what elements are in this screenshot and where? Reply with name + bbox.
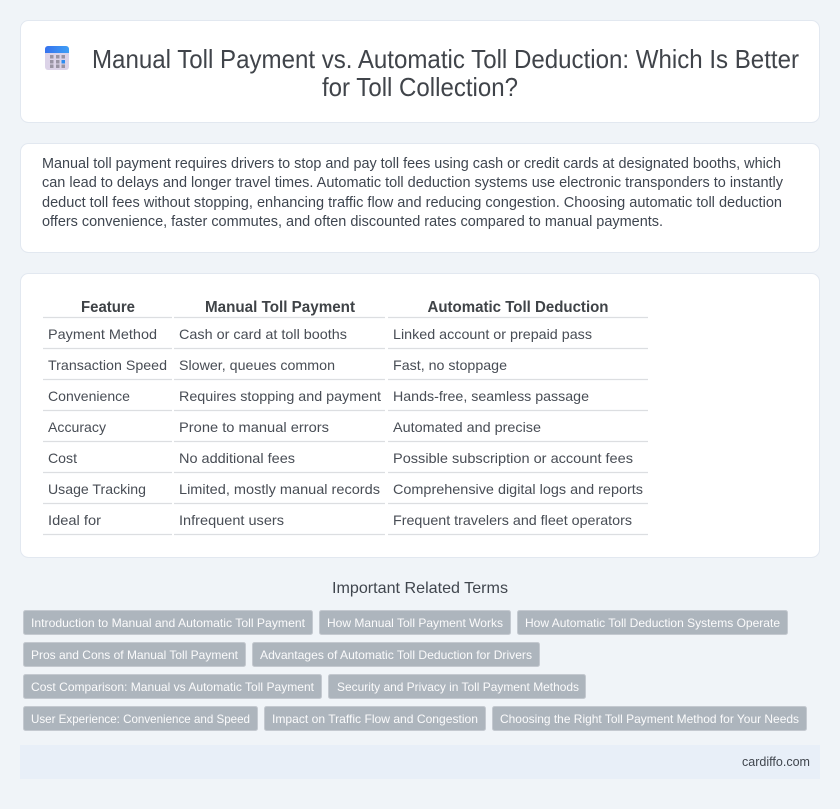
table row: payment method: Linked account or prepaid pass bbox=[393, 326, 592, 342]
title: Manual Toll Payment vs. Automatic Toll Deduction: Which Is Better bbox=[92, 46, 799, 74]
tag: Pros and Cons of Manual Toll Payment bbox=[31, 648, 239, 662]
table row: usage tracking: Limited, mostly manual records bbox=[179, 481, 380, 497]
tag: User Experience: Convenience and Speed bbox=[31, 712, 250, 726]
table row: convenience bbox=[48, 388, 589, 404]
table row: accuracy: Accuracy bbox=[48, 419, 106, 435]
tag bbox=[24, 642, 246, 666]
panel: comparison table bbox=[20, 274, 820, 558]
text block: summary: Manual toll payment requires drivers to stop and pay toll fees using cash or credit cards at designated booths, which bbox=[42, 156, 781, 172]
text block: summary: offers convenience, faster commutes, and often discounted rates compared to manual payments. bbox=[42, 214, 663, 230]
table row: transaction speed: Fast, no stoppage bbox=[393, 357, 507, 373]
table row: usage tracking bbox=[48, 481, 643, 497]
tag: Cost Comparison: Manual vs Automatic Toll Payment bbox=[31, 680, 315, 694]
table row: accuracy: Automated and precise bbox=[393, 419, 541, 435]
table row: usage tracking: Comprehensive digital logs and reports bbox=[393, 481, 643, 497]
table row: ideal for bbox=[48, 512, 632, 528]
title: for Toll Collection? bbox=[322, 74, 518, 102]
table row: accuracy: Prone to manual errors bbox=[179, 419, 329, 435]
tag bbox=[492, 706, 806, 730]
table row: transaction speed bbox=[48, 357, 507, 373]
table row: ideal for: Frequent travelers and fleet operators bbox=[393, 512, 632, 528]
table row: ideal for: Infrequent users bbox=[179, 512, 284, 528]
table header: Automatic Toll Deduction bbox=[428, 299, 608, 316]
tag bbox=[24, 610, 312, 634]
panel: summary text bbox=[20, 144, 820, 252]
tag: Security and Privacy in Toll Payment Methods bbox=[337, 680, 579, 694]
tag bbox=[24, 706, 258, 730]
tag: Advantages of Automatic Toll Deduction for Drivers bbox=[260, 648, 532, 662]
tag: Impact on Traffic Flow and Congestion bbox=[272, 712, 478, 726]
tag: Introduction to Manual and Automatic Toll Payment bbox=[31, 616, 306, 630]
table row: cost: Cost bbox=[48, 450, 77, 466]
tag bbox=[24, 674, 322, 698]
footer bbox=[20, 745, 820, 779]
text block: summary: deduct toll fees without stopping, enhancing traffic flow and reducing congestion. Choosing automatic toll deduction bbox=[42, 195, 782, 211]
table header: Feature bbox=[81, 299, 135, 316]
icon: calendar bbox=[45, 46, 69, 70]
panel: title card bbox=[20, 20, 820, 122]
table row: usage tracking: Usage Tracking bbox=[48, 481, 146, 497]
tag bbox=[320, 610, 510, 634]
tag: How Manual Toll Payment Works bbox=[327, 616, 503, 630]
tag bbox=[264, 706, 486, 730]
table row: accuracy bbox=[48, 419, 541, 435]
table header: Manual Toll Payment bbox=[205, 299, 356, 316]
text block: summary: can lead to delays and longer travel times. Automatic toll deduction systems use electronic transponders to instantly bbox=[42, 175, 784, 191]
table row: payment method bbox=[48, 326, 592, 342]
table row: payment method: Payment Method bbox=[48, 326, 157, 342]
table row: convenience: Convenience bbox=[48, 388, 130, 404]
table row: cost bbox=[48, 450, 633, 466]
table row: payment method: Cash or card at toll booths bbox=[179, 326, 347, 342]
table row: cost: No additional fees bbox=[179, 450, 295, 466]
tag bbox=[252, 642, 540, 666]
table row: transaction speed: Slower, queues common bbox=[179, 357, 335, 373]
heading: related terms: Important Related Terms bbox=[332, 580, 508, 597]
table row: convenience: Requires stopping and payment bbox=[179, 388, 381, 404]
tag bbox=[328, 674, 586, 698]
tag: How Automatic Toll Deduction Systems Operate bbox=[525, 616, 780, 630]
table header bbox=[81, 299, 608, 316]
tags: related terms bbox=[24, 610, 806, 730]
footer: cardiffo.com bbox=[742, 755, 810, 769]
table row: cost: Possible subscription or account fees bbox=[393, 450, 633, 466]
tag: Choosing the Right Toll Payment Method for Your Needs bbox=[500, 712, 799, 726]
table row: convenience: Hands-free, seamless passage bbox=[393, 388, 589, 404]
tag bbox=[518, 610, 788, 634]
table row: ideal for: Ideal for bbox=[48, 512, 101, 528]
table row: transaction speed: Transaction Speed bbox=[48, 357, 167, 373]
